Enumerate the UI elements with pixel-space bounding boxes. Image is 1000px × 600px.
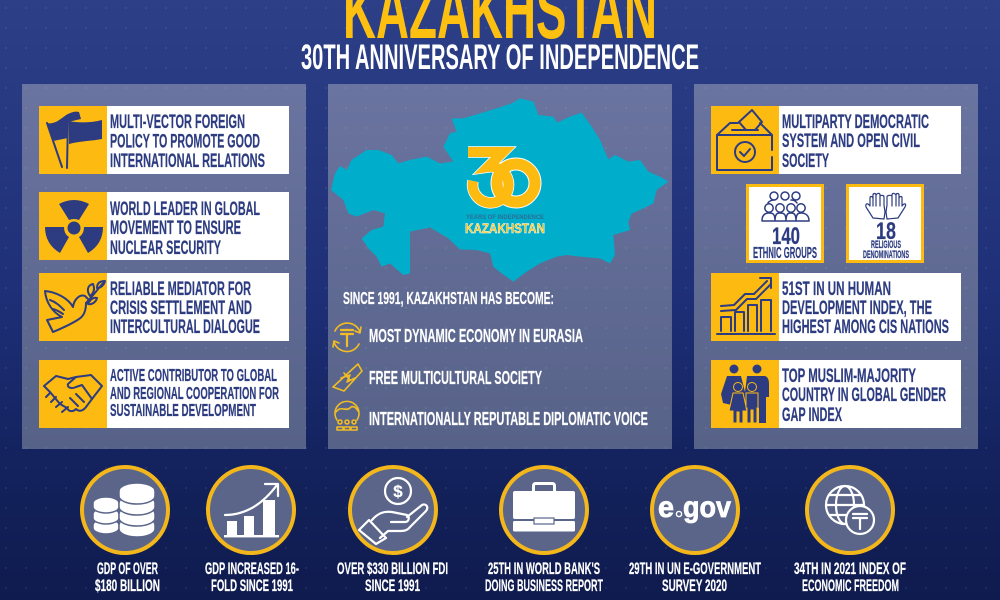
stat: religious denominations xyxy=(848,186,922,262)
text: hdi xyxy=(782,279,949,338)
text: hdi: 51ST IN UN HUMAN xyxy=(782,279,891,300)
text: cooperation: ACTIVE CONTRIBUTOR TO GLOBAL xyxy=(110,365,277,385)
stat: GDP growth: GDP INCREASED 16- xyxy=(205,560,299,578)
icon: ballot box xyxy=(717,110,772,170)
stat: religious denominations: 18 xyxy=(876,218,896,245)
panel: right background xyxy=(694,84,978,449)
stat: religious denominations: DENOMINATIONS xyxy=(863,249,909,261)
stat: FDI: SINCE 1991 xyxy=(365,577,420,595)
card: gender gap index xyxy=(711,360,961,428)
card: multi-vector foreign policy xyxy=(39,106,289,174)
icon: globe and people xyxy=(335,401,359,430)
icon: hand with coin: $ xyxy=(393,482,403,501)
stat: FDI: OVER $330 BILLION FDI xyxy=(337,560,448,578)
text: dynamic economy: MOST DYNAMIC ECONOMY IN EURASIA xyxy=(369,326,583,346)
icon: radiation xyxy=(45,200,103,253)
text: multi-vector: INTERNATIONAL RELATIONS xyxy=(110,151,265,172)
card: cooperation xyxy=(39,360,289,428)
icon: family xyxy=(721,364,769,423)
subtitle: 30TH ANNIVERSARY OF INDEPENDENCE xyxy=(301,38,699,77)
stat: economic freedom: ECONOMIC FREEDOM xyxy=(802,577,899,595)
text: democratic xyxy=(782,112,929,172)
icon: joined hands xyxy=(333,364,362,391)
card: crisis mediator xyxy=(39,273,289,341)
stat: economic freedom: 34TH IN 2021 INDEX OF xyxy=(794,560,906,578)
text: cooperation: AND REGIONAL COOPERATION FOR xyxy=(110,383,279,403)
stat: religious denominations: RELIGIOUS xyxy=(871,239,901,251)
panel: foreign policy achievements xyxy=(39,106,289,428)
stat: GDP: GDP OF OVER xyxy=(97,560,158,578)
card: democratic system xyxy=(711,106,961,174)
text: multicultural society: FREE MULTICULTURAL SOCIETY xyxy=(369,368,542,388)
icon: growth chart xyxy=(717,278,775,334)
stat: e-government: SURVEY 2020 xyxy=(662,577,727,595)
icon: rising bars xyxy=(224,484,279,537)
text: since 1991: SINCE 1991, KAZAKHSTAN HAS BECOME: xyxy=(343,288,554,308)
stat: ethnic groups xyxy=(748,186,822,262)
text: democratic: SOCIETY xyxy=(782,151,829,172)
icon: briefcase xyxy=(513,484,575,532)
stat: GDP xyxy=(82,467,168,595)
text: cooperation: SUSTAINABLE DEVELOPMENT xyxy=(110,400,256,420)
text: nuclear xyxy=(110,199,260,259)
stat: economic freedom xyxy=(794,467,906,595)
icon: coin stacks xyxy=(93,483,155,537)
text: mediator: RELIABLE MEDIATOR FOR xyxy=(110,279,251,300)
logo: 30 years of independence: KAZAKHSTAN xyxy=(465,220,545,236)
text: mediator: INTERCULTURAL DIALOGUE xyxy=(110,317,260,338)
text: multi-vector xyxy=(110,112,265,172)
stat: GDP growth xyxy=(205,467,299,595)
map: Kazakhstan xyxy=(331,98,668,282)
text: gender gap: GAP INDEX xyxy=(782,405,842,426)
stat: e-government xyxy=(629,467,761,595)
icon: raised hands xyxy=(866,193,906,219)
panel: domestic achievements xyxy=(711,106,961,428)
logo: e-gov: e xyxy=(658,491,674,524)
icon: globe with tenge coin xyxy=(826,486,874,534)
text: gender gap xyxy=(782,366,946,426)
icon: flags xyxy=(47,112,102,168)
text: gender gap: TOP MUSLIM-MAJORITY xyxy=(782,366,916,387)
text: multi-vector: POLICY TO PROMOTE GOOD xyxy=(110,132,260,152)
stat: doing business xyxy=(485,467,603,595)
text: nuclear: MOVEMENT TO ENSURE xyxy=(110,218,241,239)
text: multi-vector: MULTI-VECTOR FOREIGN xyxy=(110,112,245,133)
card: human development index xyxy=(711,273,961,341)
stat: GDP growth: FOLD SINCE 1991 xyxy=(211,577,293,595)
text: cooperation xyxy=(110,365,279,420)
panel: center background xyxy=(328,84,672,449)
text: nuclear: NUCLEAR SECURITY xyxy=(110,238,221,259)
icon: people xyxy=(762,192,809,221)
logo: e-gov: gov xyxy=(683,491,731,524)
logo: 30 years of independence: YEARS OF INDEPENDENCE xyxy=(466,214,545,221)
stat: ethnic groups: ETHNIC GROUPS xyxy=(753,245,817,262)
logo: 30 years of independence xyxy=(465,152,545,236)
panel: center map and summary xyxy=(331,98,668,430)
stat: doing business: 25TH IN WORLD BANK'S xyxy=(488,560,600,578)
stat: FDI xyxy=(337,467,448,595)
text: mediator: CRISIS SETTLEMENT AND xyxy=(110,298,252,319)
text: diplomatic voice: INTERNATIONALLY REPUTABLE DIPLOMATIC VOICE xyxy=(369,409,648,429)
icon: dove xyxy=(45,281,105,332)
icon: tenge cycle xyxy=(333,323,361,352)
text: nuclear: WORLD LEADER IN GLOBAL xyxy=(110,199,260,220)
card: nuclear security xyxy=(39,192,289,260)
stat: doing business: DOING BUSINESS REPORT xyxy=(485,577,603,595)
icon: handshake xyxy=(44,375,102,412)
text: mediator xyxy=(110,279,260,338)
stat: ethnic groups: 140 xyxy=(772,223,800,250)
logo: e-gov xyxy=(658,491,731,524)
panel: left background xyxy=(22,84,306,449)
stat: e-government: 29TH IN UN E-GOVERNMENT xyxy=(629,560,761,578)
stat: GDP: $180 BILLION xyxy=(95,577,160,595)
